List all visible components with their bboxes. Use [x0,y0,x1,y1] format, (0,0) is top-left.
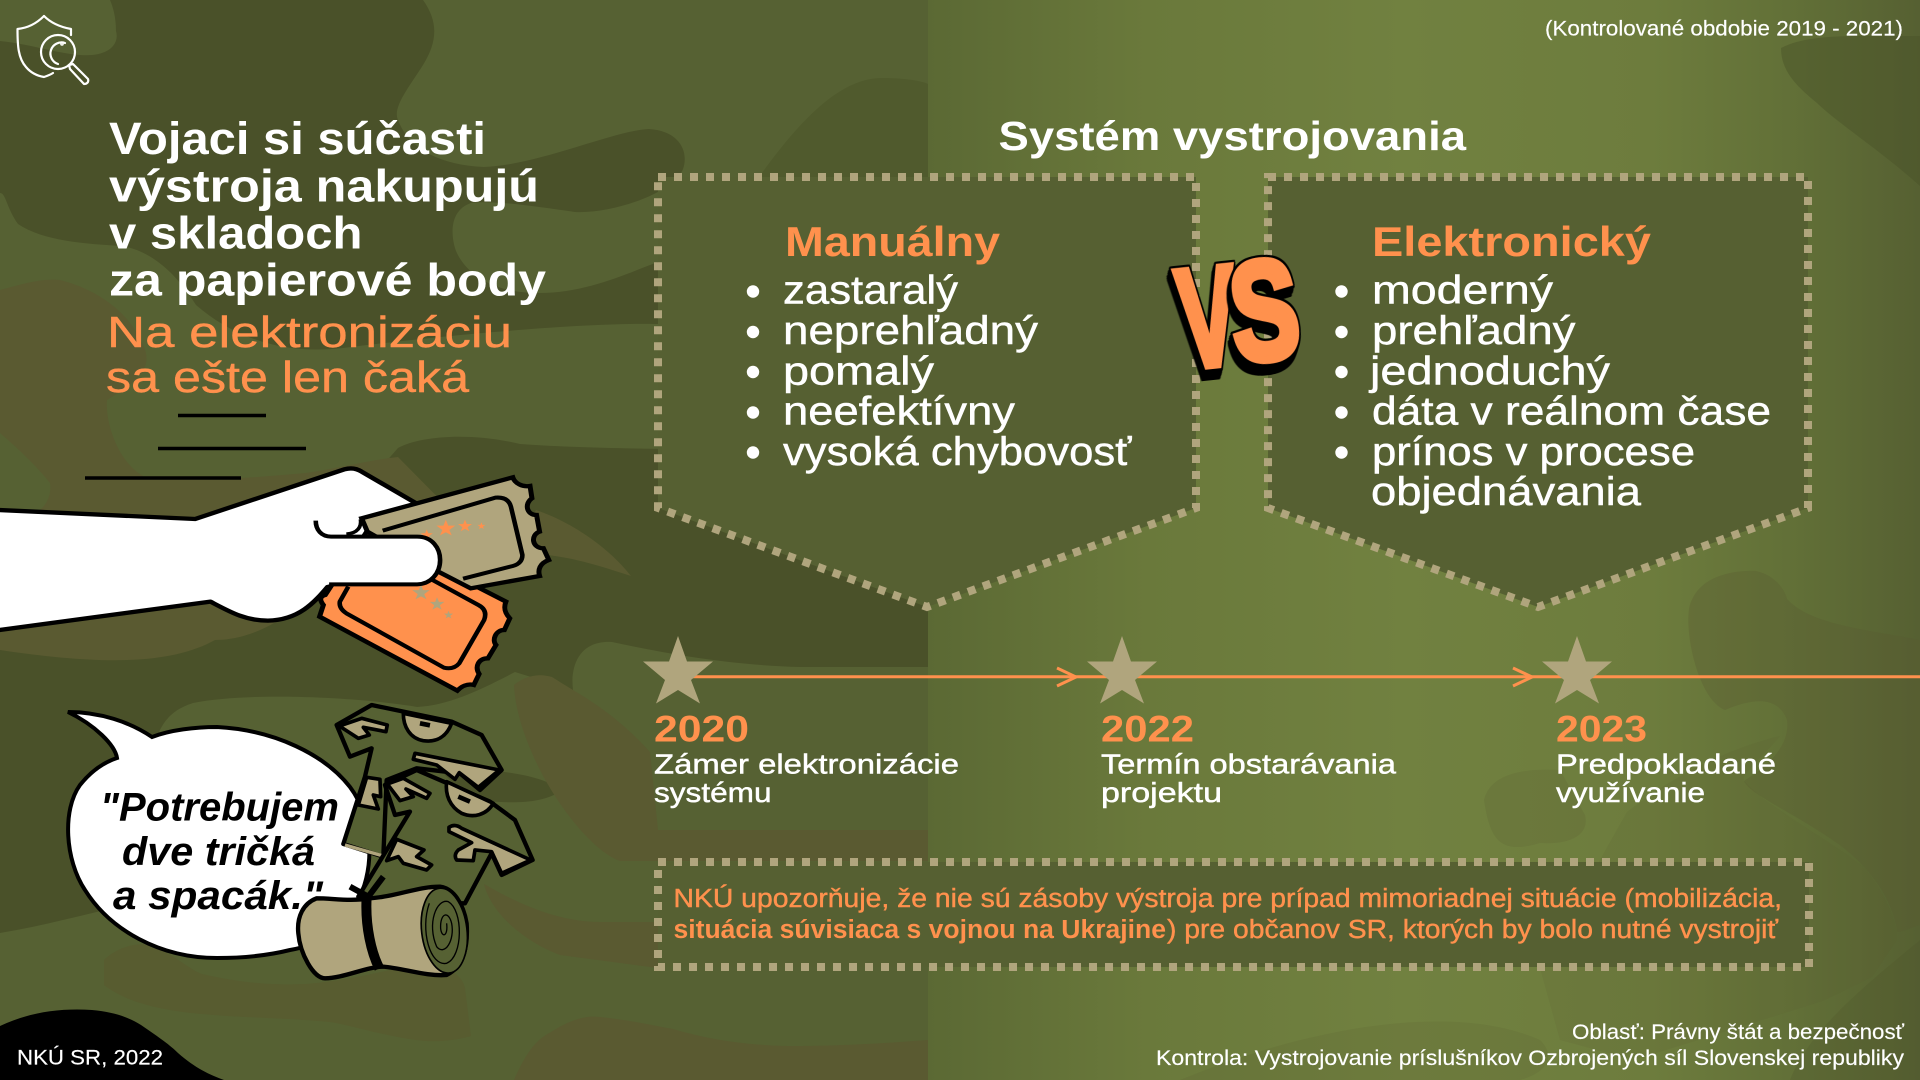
milestone 2022 [1101,708,1397,808]
footer: audit area and title: Kontrola: Vystrojovanie príslušníkov Ozbrojených síl Slovenskej republiky [1156,1047,1905,1070]
list: manual properties [783,268,1133,474]
tan ticket [362,477,549,588]
illustration: t-shirts and sleeping mat [298,705,533,978]
footer: audit area and title: Oblasť: Právny štát a bezpečnosť [1572,1021,1905,1044]
milestone 2020: 2020 [654,708,749,750]
list: electronic properties: prínos v procese [1372,430,1695,474]
list: manual properties: vysoká chybovosť [783,430,1133,474]
list: electronic properties: jednoduchý [1369,349,1610,393]
icon: shield with magnifying glass [18,16,88,84]
milestone 2020: Zámer elektronizácie [654,748,959,780]
quote text: "Potrebujem [100,786,339,830]
main heading: v skladoch [109,208,362,258]
panel title: manual: Manuálny [785,218,1001,265]
list: manual properties: zastaralý [783,268,958,312]
milestone 2023: využívanie [1556,777,1705,808]
versus badge: S [1223,229,1306,392]
arrow 2 [1513,668,1532,686]
section heading: Systém vystrojovania [998,113,1467,159]
finger [249,521,440,600]
milestone 2022: Termín obstarávania [1101,748,1397,780]
strap tail [350,877,383,897]
callout: NKU warning: ) pre občanov SR, ktorých by bolo nutné vystrojiť [1167,916,1778,944]
bullet dots: manual [747,285,759,459]
callout: NKU warning: NKÚ upozorňuje, že nie sú zásoby výstroja pre prípad mimoriadnej situácie (mobilizácia, [674,884,1782,913]
milestone 2023 [1556,708,1776,808]
bullet dots: electronic [1335,285,1348,459]
main heading: Vojaci si súčasti [109,113,486,164]
arrow 1 [1057,668,1076,686]
list: electronic properties: dáta v reálnom čase [1372,390,1771,434]
period note: (Kontrolované obdobie 2019 - 2021) [1545,18,1903,40]
star 2022 [1087,636,1157,704]
callout: NKU warning [658,862,1809,967]
versus badge: V [1171,236,1245,398]
t-shirt back [337,705,502,857]
motion lines [85,416,306,478]
quote text [100,786,339,918]
orange subheading: sa ešte len čaká [106,353,470,402]
main heading [109,113,546,306]
hand back [0,468,459,632]
list: electronic properties: prehľadný [1372,309,1576,353]
list: manual properties: pomalý [783,349,934,393]
sleeping mat roll [298,886,472,978]
panel: electronic system [1268,177,1808,607]
milestone 2022: projektu [1101,777,1222,808]
t-shirt front [358,770,533,903]
speech bubble [68,712,369,958]
quote text: dve tričká [122,830,315,874]
bottom-left black corner shape [0,1010,224,1080]
callout: NKU warning: situácia súvisiaca s vojnou na Ukrajine [674,916,1166,944]
star 2023 [1542,636,1612,704]
panel title: electronic: Elektronický [1372,218,1652,265]
main heading: za papierové body [109,254,546,306]
versus badge [1171,229,1306,398]
list: manual properties: neefektívny [783,390,1015,434]
list: manual properties: neprehľadný [783,309,1038,353]
orange subheading: Na elektronizáciu [107,308,512,357]
panel: manual system [658,177,1196,607]
milestone 2022: 2022 [1101,708,1194,750]
list: electronic properties: moderný [1372,268,1553,312]
milestone 2023: 2023 [1556,708,1647,750]
quote text: a spacák." [113,874,324,918]
illustration: hand holding tickets [0,468,549,691]
timeline [643,636,1920,808]
star 2020 [643,636,713,704]
source label: NKÚ SR, 2022 [17,1046,163,1070]
main heading: výstroja nakupujú [109,160,539,212]
milestone 2020 [654,708,959,808]
orange ticket [320,531,510,691]
footer: audit area and title [1156,1021,1905,1070]
orange subheading [106,308,512,402]
milestone 2020: systému [654,777,772,808]
list: electronic properties: objednávania [1371,470,1642,514]
timeline line [692,675,1920,678]
milestone 2023: Predpokladané [1556,748,1776,780]
list: electronic properties [1369,268,1771,514]
